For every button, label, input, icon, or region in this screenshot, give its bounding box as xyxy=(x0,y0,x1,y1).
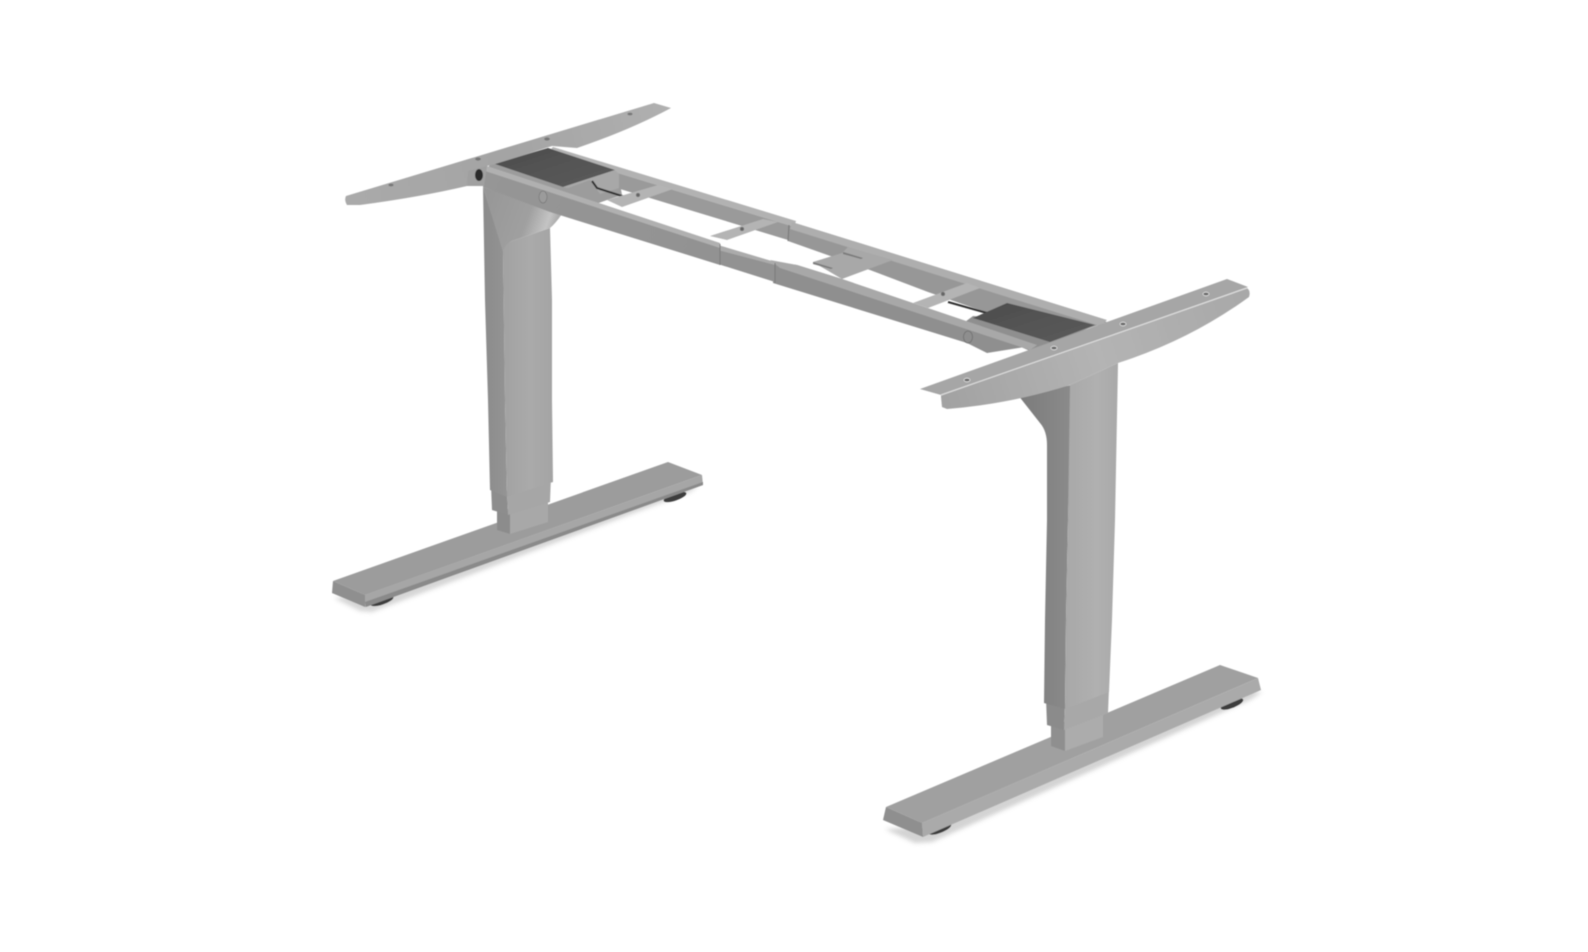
leveling pad front xyxy=(927,821,953,837)
crossbeam frame xyxy=(482,147,1107,353)
cable left xyxy=(592,181,625,197)
cable right xyxy=(948,302,987,313)
right leg xyxy=(1018,363,1118,751)
dark motor panel left xyxy=(495,148,615,187)
plate highlight edge xyxy=(941,288,1247,395)
plate face xyxy=(345,103,671,205)
back rail inner face xyxy=(560,152,790,240)
column right face xyxy=(1065,363,1118,709)
leveling pad rear xyxy=(662,490,688,504)
foot shadow xyxy=(334,486,698,612)
leveling pad rear xyxy=(1219,696,1245,712)
right foot xyxy=(883,665,1262,843)
left foot xyxy=(332,462,703,612)
gap fill behind left end xyxy=(487,148,622,206)
right top mounting plate xyxy=(920,279,1250,409)
column stage 3 xyxy=(1051,708,1103,751)
back rail joint xyxy=(788,225,789,241)
column outer right face xyxy=(503,228,553,497)
column left face xyxy=(1018,385,1072,709)
front rail section 1 xyxy=(482,166,720,265)
rivet left xyxy=(539,191,547,203)
leveling pad front xyxy=(369,594,395,608)
center bracket plate xyxy=(813,247,893,279)
foot side face xyxy=(922,678,1261,837)
plate front flange xyxy=(941,288,1250,409)
foot end face xyxy=(883,807,923,837)
left top mounting plate xyxy=(345,103,671,205)
foot end face xyxy=(332,581,365,607)
mounting holes xyxy=(964,292,1209,382)
foot side face xyxy=(365,475,703,607)
foot shadow xyxy=(885,690,1262,843)
rivet right xyxy=(964,331,972,343)
column stage 2 xyxy=(491,476,551,515)
column shoulder xyxy=(483,187,562,252)
front rail xyxy=(482,166,1037,353)
front rail section 3 xyxy=(770,260,1037,353)
mounting holes xyxy=(388,113,633,186)
cross brace 1 xyxy=(607,185,673,207)
column stage 2 xyxy=(1046,688,1109,730)
back rail xyxy=(548,147,1107,338)
front rail section 2 xyxy=(718,245,775,283)
cross brace 3 xyxy=(913,283,980,308)
rail end block xyxy=(467,166,487,186)
roller bearing xyxy=(475,169,483,181)
foot top face xyxy=(333,462,702,595)
foot top face xyxy=(886,665,1258,823)
back rail top face xyxy=(548,147,796,227)
dark motor panel right xyxy=(973,303,1095,342)
control box left xyxy=(563,170,625,197)
column stage 3 xyxy=(497,496,548,534)
plate top face xyxy=(920,279,1248,395)
gap fill behind right end xyxy=(965,316,1095,351)
cross brace 2 xyxy=(710,219,778,240)
foot lower side band xyxy=(365,482,703,607)
left leg xyxy=(483,187,562,534)
column outer left face xyxy=(483,187,507,497)
